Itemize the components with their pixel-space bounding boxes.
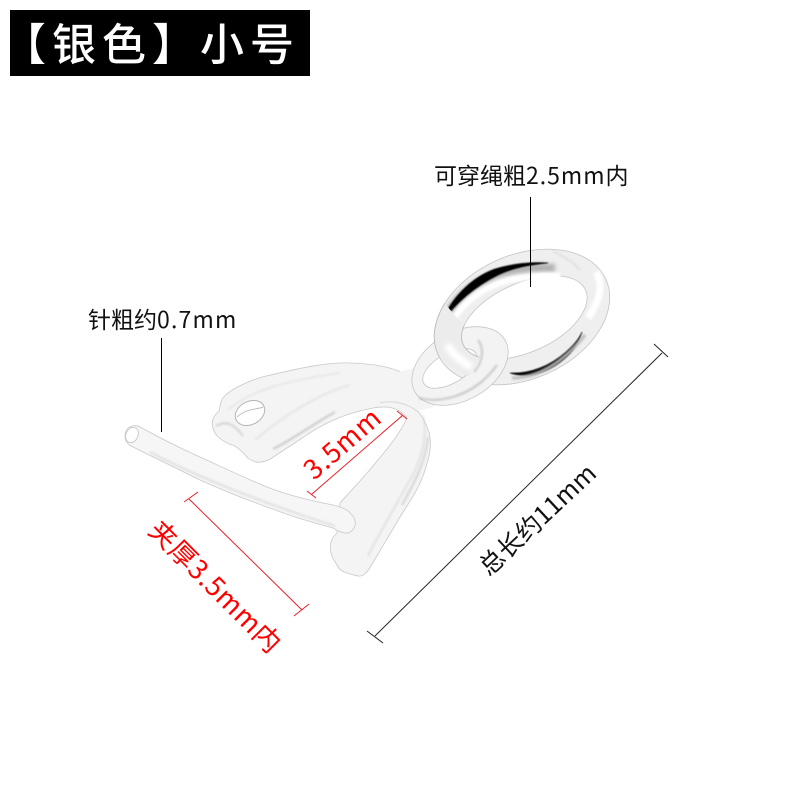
bail eyelet hole xyxy=(231,396,269,430)
silver pendant bail illustration xyxy=(123,223,631,576)
small connecting ring xyxy=(398,311,522,421)
bail body xyxy=(212,363,440,576)
pin xyxy=(123,425,355,533)
dimension: inner opening 3.5mm: 3.5mm xyxy=(294,397,389,487)
dimension: total length: 总长约11mm xyxy=(470,455,603,583)
title banner: 小号 xyxy=(200,9,300,73)
title banner: 【银色】 xyxy=(2,9,202,73)
large jump ring xyxy=(413,223,631,411)
dimension: clamp thickness: 夹厚3.5mm内 xyxy=(141,510,292,661)
callout: pin thickness: 针粗约0.7mm xyxy=(88,301,238,335)
bail fold details xyxy=(216,373,428,556)
title banner xyxy=(2,9,310,76)
dimension: total length xyxy=(367,344,668,643)
large ring front section xyxy=(434,303,480,376)
callout: cord thickness: 可穿绳粗2.5mm内 xyxy=(434,157,629,191)
